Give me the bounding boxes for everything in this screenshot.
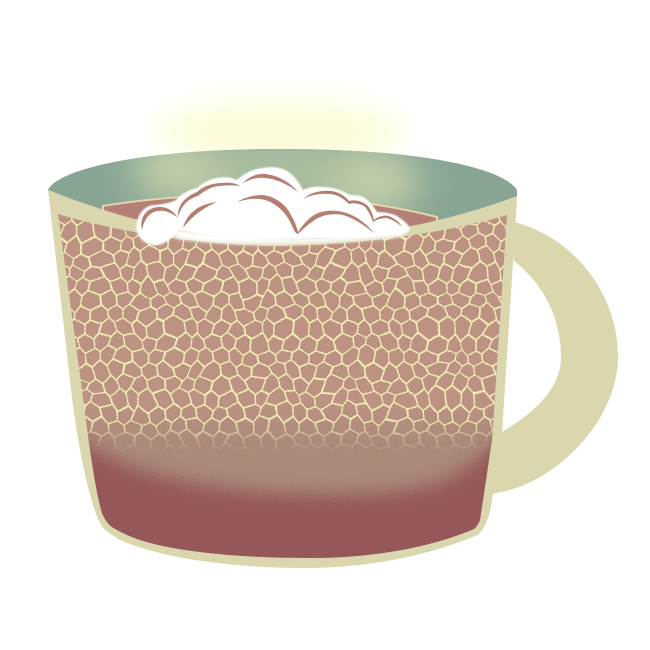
foam cell mosaic [59,217,506,449]
dark espresso layer [87,420,493,558]
foam white shape [137,167,410,245]
foam dollop [137,167,410,245]
wall highlights [120,149,434,212]
foam soft base [175,230,405,244]
arc: left puff [141,207,178,230]
arc: centre left [183,202,217,228]
steam glow [155,100,405,164]
infographic: coffee cup [48,88,618,568]
milk layer base [58,214,507,558]
arc: top [242,174,298,192]
inner wall [48,149,517,220]
cup body [48,190,517,568]
arc: large centre [237,195,374,234]
coffee surface [102,196,438,231]
arc: right steps [303,191,402,227]
coffee panel with layers [58,214,507,558]
cup interior rim [48,149,517,241]
foam left puff [138,214,172,244]
foam shading arcs [141,174,402,234]
arc: upper left [178,183,240,217]
mug handle [490,221,618,494]
